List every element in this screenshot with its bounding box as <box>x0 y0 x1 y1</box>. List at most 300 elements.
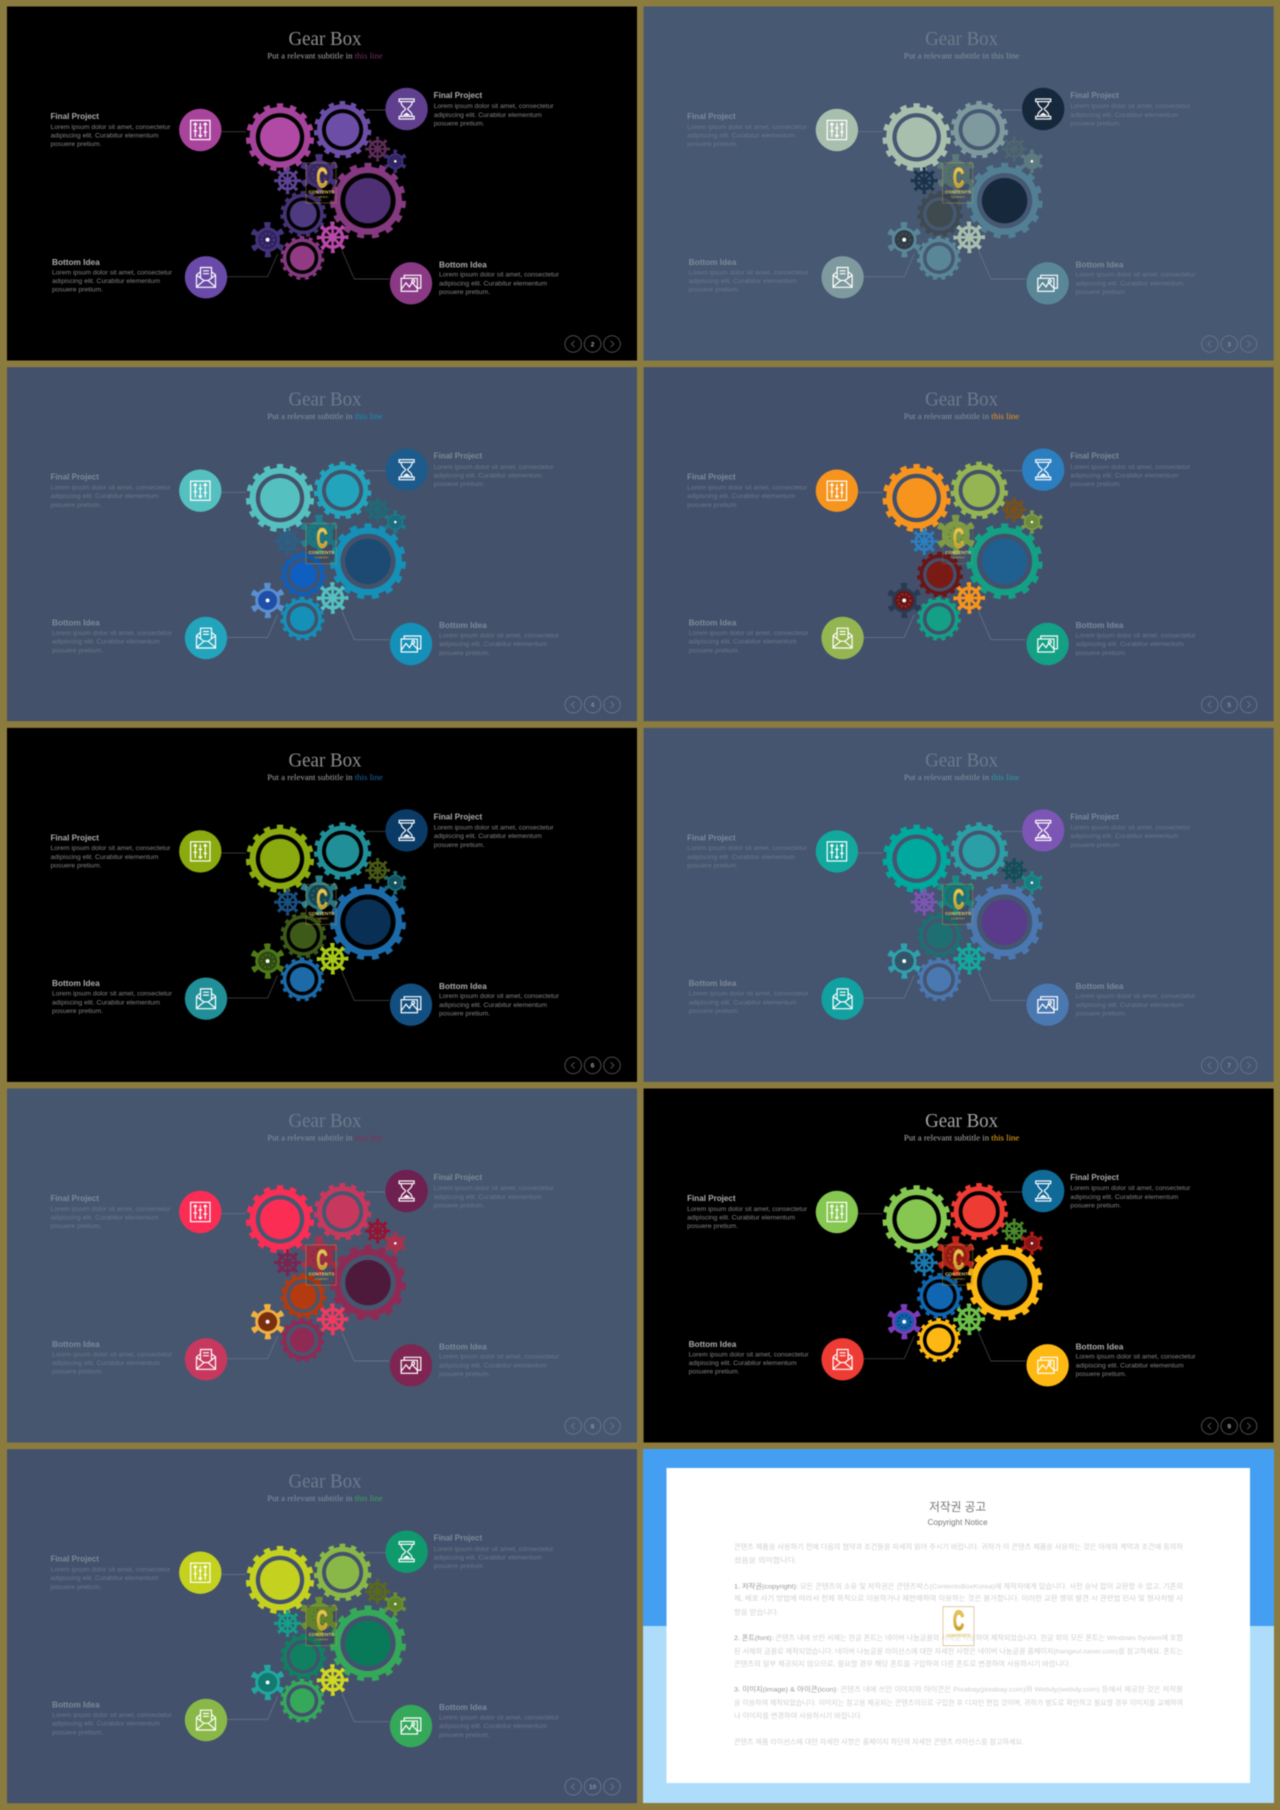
text block bottom right: Bottom Idea <box>439 621 487 630</box>
middle gear <box>918 192 961 236</box>
text block left: Lorem ipsum dolor sit amet, consectetur <box>50 485 171 492</box>
text block bottom left: Lorem ipsum dolor sit amet, consectetur <box>689 1351 809 1358</box>
icon circle: envelope <box>185 617 227 659</box>
top left gear <box>248 466 312 530</box>
helm wheel bottom <box>955 1305 983 1333</box>
top left gear <box>885 827 949 891</box>
large gear <box>969 886 1040 958</box>
notice subheading: Copyright Notice <box>928 1517 988 1527</box>
text block left <box>687 112 808 148</box>
small gear left <box>890 586 919 615</box>
helm wheel right <box>1003 499 1025 521</box>
icon circle: hourglass <box>1022 448 1064 491</box>
text block bottom right: posuere pretium. <box>1076 289 1127 296</box>
text block bottom left: adipiscing elit. Curabitur elementum <box>689 639 797 646</box>
top left gear <box>885 105 949 169</box>
text block bottom left: adipiscing elit. Curabitur elementum <box>52 1721 160 1728</box>
watermark logo: CONTENTS <box>308 550 334 555</box>
text block top right: adipiscing elit. Curabitur elementum <box>434 1194 542 1201</box>
text block bottom left: adipiscing elit. Curabitur elementum <box>52 639 160 646</box>
watermark logo: C <box>953 1605 964 1636</box>
icon circle: pictures <box>1026 984 1069 1026</box>
helm wheel bottom <box>955 584 983 612</box>
middle gear <box>918 553 961 596</box>
text block top right: Lorem ipsum dolor sit amet, consectetur <box>434 1546 554 1553</box>
text block top right: Lorem ipsum dolor sit amet, consectetur <box>1070 825 1191 832</box>
text block left: Final Project <box>50 473 99 482</box>
slide background <box>7 1449 637 1803</box>
icon circle: sliders <box>816 1191 858 1233</box>
text block left: posuere pretium. <box>687 1223 738 1230</box>
icon circle: hourglass <box>385 809 428 852</box>
text block bottom right: posuere pretium. <box>1076 650 1127 657</box>
text block left: posuere pretium. <box>50 863 102 870</box>
text block top right: Final Project <box>434 91 483 100</box>
bottom gear <box>918 598 960 639</box>
subtitle: Put a relevant subtitle in this line <box>904 1134 1020 1142</box>
gear cluster <box>885 824 1041 1000</box>
text block top right: posuere pretium. <box>1070 1202 1121 1210</box>
text block bottom left: Lorem ipsum dolor sit amet, consectetur <box>52 269 173 276</box>
subtitle: Put a relevant subtitle in this line <box>267 773 383 782</box>
small gear right <box>386 512 405 532</box>
subtitle: Put a relevant subtitle in this line <box>904 773 1020 782</box>
text block top right: adipiscing elit. Curabitur elementum <box>1070 833 1179 840</box>
helm wheel bottom <box>955 945 983 973</box>
icon circle: envelope <box>821 978 864 1020</box>
text block bottom left: posuere pretium. <box>52 1008 103 1015</box>
text block bottom right: adipiscing elit. Curabitur elementum <box>1076 1362 1184 1369</box>
text block bottom left: Bottom Idea <box>52 979 100 988</box>
text block bottom left: posuere pretium. <box>689 1008 740 1015</box>
subtitle: Put a relevant subtitle in this line <box>904 52 1020 60</box>
title: Gear Box <box>288 389 362 411</box>
icon circle: sliders <box>816 830 858 873</box>
title: Gear Box <box>288 28 362 50</box>
notice body text: 콘텐츠 제품 라이선스에 대한 자세한 사항은 홈페이지 하단의 자세한 콘텐츠 라이선스를 참고하세요. <box>734 1737 1024 1746</box>
center gear <box>940 1240 972 1272</box>
text block bottom left <box>52 1340 173 1376</box>
text block left: posuere pretium. <box>50 141 102 148</box>
icon circle: sliders <box>179 470 222 512</box>
text block bottom right <box>1076 260 1196 296</box>
middle gear <box>282 553 325 596</box>
page navigation: 7 <box>1227 1063 1231 1070</box>
watermark logo: CONTENTS <box>945 1272 971 1276</box>
watermark logo <box>306 162 336 203</box>
text block bottom left: posuere pretium. <box>52 1369 103 1376</box>
text block bottom right: adipiscing elit. Curabitur elementum <box>439 1723 547 1730</box>
text block bottom left: adipiscing elit. Curabitur elementum <box>689 1360 797 1367</box>
text block top right <box>1070 91 1191 128</box>
watermark logo <box>306 523 336 564</box>
text block top right: posuere pretium. <box>434 481 485 488</box>
title: Gear Box <box>288 1110 362 1132</box>
text block bottom right: posuere pretium. <box>439 1371 490 1378</box>
watermark logo <box>306 884 336 924</box>
text block bottom left: Bottom Idea <box>689 979 737 988</box>
small gear right <box>386 1594 405 1614</box>
text block left: adipiscing elit. Curabitur elementum <box>50 854 159 861</box>
helm wheel left <box>912 530 936 553</box>
top right gear <box>316 103 370 157</box>
page navigation <box>1202 1418 1257 1434</box>
watermark logo: C <box>953 162 964 193</box>
text block bottom right <box>1076 982 1196 1018</box>
small gear left <box>890 1307 919 1336</box>
slide background <box>7 728 637 1082</box>
gear cluster <box>248 1185 405 1361</box>
text block bottom left: posuere pretium. <box>689 287 740 294</box>
text block bottom left: Bottom Idea <box>689 618 737 628</box>
text block bottom left <box>52 979 173 1015</box>
small gear left <box>890 947 919 976</box>
icon circle: hourglass <box>385 1170 428 1212</box>
watermark logo: CONTENTS <box>308 1272 334 1276</box>
text block bottom right <box>1076 621 1196 657</box>
text block bottom right: Bottom Idea <box>439 1703 487 1712</box>
center gear <box>940 879 972 912</box>
helm wheel bottom <box>319 1666 346 1694</box>
slide page 6: lime and blue gears on black <box>7 728 637 1082</box>
text block bottom left: posuere pretium. <box>52 287 103 294</box>
subtitle: Put a relevant subtitle in this line <box>267 412 383 421</box>
text block left: Final Project <box>50 112 99 121</box>
watermark logo: C <box>316 162 328 193</box>
helm wheel bottom <box>319 1305 346 1333</box>
top left gear <box>885 466 949 530</box>
text block top right <box>434 91 554 128</box>
connector lines <box>221 831 389 1000</box>
text block bottom left: posuere pretium. <box>689 647 740 654</box>
center gear <box>940 518 972 551</box>
connector lines <box>221 1553 389 1722</box>
helm wheel left <box>276 1251 299 1274</box>
text block left: Lorem ipsum dolor sit amet, consectetur <box>50 1206 171 1213</box>
icon circle: hourglass <box>385 88 428 130</box>
text block top right: adipiscing elit. Curabitur elementum <box>1070 1194 1179 1201</box>
notice heading: 저작권 공고 <box>929 1500 986 1514</box>
page navigation: 9 <box>1227 1423 1231 1430</box>
text block bottom left <box>52 618 173 654</box>
notice body text: 2. 폰트(font): 콘텐츠 내에 쓰인 서체는 한글 폰트는 네이버 나눔글꼴의 서체를 사용하여 제작되었습니다. 한글 외의 모든 폰트는 Windows System에 포함 <box>734 1633 1183 1642</box>
center gear <box>303 879 336 912</box>
text block bottom left: adipiscing elit. Curabitur elementum <box>689 999 797 1006</box>
text block left: posuere pretium. <box>50 502 102 509</box>
icon circle: sliders <box>179 109 222 151</box>
center gear <box>303 1240 336 1272</box>
subtitle: Put a relevant subtitle in this line <box>904 412 1020 421</box>
large gear <box>332 165 404 236</box>
watermark logo: COMPANY <box>315 1638 329 1642</box>
text block bottom left: Bottom Idea <box>52 258 100 267</box>
text block top right: Final Project <box>434 1173 483 1182</box>
connector lines <box>221 110 389 279</box>
text block bottom right: Bottom Idea <box>1076 260 1124 269</box>
icon circle: sliders <box>179 1552 222 1594</box>
text block left: Lorem ipsum dolor sit amet, consectetur <box>50 124 171 131</box>
text block left <box>50 112 171 148</box>
watermark logo: CONTENTS <box>946 1633 970 1638</box>
small gear right <box>1022 873 1041 892</box>
top right gear <box>316 463 370 517</box>
center gear <box>303 158 336 190</box>
small gear left <box>253 225 282 254</box>
bottom gear <box>918 959 960 1000</box>
watermark logo: CONTENTS <box>308 911 334 916</box>
icon circle: pictures <box>1026 1344 1069 1386</box>
slide page 3: grey-green gears on slate <box>644 6 1274 360</box>
small gear right <box>1022 512 1041 532</box>
text block top right: adipiscing elit. Curabitur elementum <box>1070 112 1179 119</box>
notice body text: 된 서체와 글꼴로 제작되었습니다. 네이버 나눔글꼴 라이선스에 대한 자세한 사항은 네이버 나눔글꼴 홈페이지(hangeul.naver.com)를 참고하세요. 폰트는 <box>734 1646 1183 1656</box>
text block left: Final Project <box>687 833 736 842</box>
text block bottom right: adipiscing elit. Curabitur elementum <box>1076 280 1184 287</box>
helm wheel left <box>912 169 936 192</box>
icon circle: envelope <box>821 617 864 659</box>
text block bottom left: adipiscing elit. Curabitur elementum <box>52 278 160 285</box>
watermark logo: COMPANY <box>951 556 965 560</box>
center gear <box>940 158 972 190</box>
slide background <box>644 367 1274 721</box>
middle gear <box>918 914 961 957</box>
slide page 10: green gears on slate <box>7 1449 637 1803</box>
watermark logo <box>943 884 973 924</box>
helm wheel right <box>1003 860 1025 881</box>
text block bottom right <box>439 260 560 296</box>
text block top right <box>1070 1173 1191 1210</box>
text block bottom right <box>439 621 560 657</box>
bottom gear <box>918 1319 960 1361</box>
text block top right <box>434 1173 554 1210</box>
watermark logo: COMPANY <box>315 195 329 199</box>
text block top right: adipiscing elit. Curabitur elementum <box>434 1554 542 1561</box>
icon circle: envelope <box>821 256 864 298</box>
text block top right: Lorem ipsum dolor sit amet, consectetur <box>434 825 554 832</box>
helm wheel right <box>367 138 388 160</box>
text block top right <box>1070 812 1191 849</box>
small gear right <box>1022 152 1041 171</box>
text block left: Final Project <box>687 112 736 121</box>
text block bottom right: posuere pretium. <box>439 1011 490 1018</box>
text block left: posuere pretium. <box>50 1584 102 1591</box>
bottom gear <box>282 1319 323 1361</box>
page navigation: 5 <box>1227 702 1231 709</box>
slide page 8: crimson gears on slate <box>7 1088 637 1442</box>
text block bottom left: Bottom Idea <box>52 1700 100 1709</box>
watermark logo: CONTENTS <box>945 190 971 194</box>
text block left: Final Project <box>50 833 99 842</box>
connector lines <box>858 471 1026 640</box>
text block left: Lorem ipsum dolor sit amet, consectetur <box>687 485 808 492</box>
text block bottom right: posuere pretium. <box>439 1732 490 1739</box>
subtitle: Put a relevant subtitle in this line <box>267 52 383 60</box>
bottom gear <box>282 598 323 639</box>
text block bottom right: Bottom Idea <box>1076 1342 1124 1351</box>
page navigation <box>565 1418 620 1434</box>
text block bottom left <box>52 1700 173 1736</box>
helm wheel right <box>1003 1220 1025 1242</box>
middle gear <box>282 914 325 957</box>
notice body text: 항을 받습니다. <box>734 1608 779 1616</box>
helm wheel left <box>912 1251 936 1274</box>
notice body text: 3. 이미지(image) & 아이콘(icon): 콘텐츠 내에 쓰인 이미지와 아이콘은 Pixabay(pixabay.com)와 Webdy(webdy.com) 등에서 제공한 것은 저작물 <box>734 1684 1183 1694</box>
large gear <box>969 165 1040 236</box>
large gear <box>332 886 404 958</box>
small gear left <box>890 225 919 254</box>
text block bottom right: posuere pretium. <box>1076 1371 1127 1378</box>
large gear <box>332 1608 404 1679</box>
text block bottom right: adipiscing elit. Curabitur elementum <box>439 1362 547 1369</box>
notice body text: 제, 배포 사기 방법에 따라서 전체 목적으로 이용하거나 재판매하여 이용하는 것은 불가합니다. 이러한 교환 행위 발견 시 관련법 민사 및 형사처벌 사 <box>734 1594 1183 1602</box>
text block bottom left <box>689 1340 809 1376</box>
icon circle: sliders <box>816 470 858 512</box>
watermark logo: COMPANY <box>315 556 329 560</box>
text block bottom right <box>439 1703 560 1739</box>
text block bottom left <box>689 979 809 1015</box>
center gear <box>303 518 336 551</box>
text block bottom right: adipiscing elit. Curabitur elementum <box>439 280 547 287</box>
text block bottom left: Bottom Idea <box>689 258 737 267</box>
text block bottom right: adipiscing elit. Curabitur elementum <box>439 1002 547 1009</box>
watermark logo: C <box>316 884 328 915</box>
top right gear <box>952 824 1006 878</box>
watermark logo: COMPANY <box>315 1277 329 1281</box>
text block left <box>50 1194 171 1230</box>
page navigation <box>1202 336 1257 352</box>
text block bottom right: adipiscing elit. Curabitur elementum <box>439 641 547 648</box>
text block left: adipiscing elit. Curabitur elementum <box>50 1214 159 1222</box>
text block bottom right: adipiscing elit. Curabitur elementum <box>1076 1002 1184 1009</box>
helm wheel left <box>912 890 936 914</box>
text block bottom left: Lorem ipsum dolor sit amet, consectetur <box>689 991 809 998</box>
icon circle: envelope <box>821 1338 864 1380</box>
slide page 2: purple gears on black <box>7 6 637 360</box>
gear cluster <box>885 103 1041 279</box>
large gear <box>332 1247 404 1318</box>
page navigation <box>565 696 620 713</box>
page navigation <box>565 1057 620 1074</box>
page navigation: 6 <box>591 1063 595 1070</box>
text block bottom left: Lorem ipsum dolor sit amet, consectetur <box>689 269 809 276</box>
text block bottom right: Bottom Idea <box>439 982 487 991</box>
text block left <box>50 1555 171 1591</box>
text block bottom right: Lorem ipsum dolor sit amet, consectetur <box>439 1354 560 1361</box>
icon circle: hourglass <box>385 1530 428 1573</box>
icon circle: pictures <box>390 623 432 665</box>
text block bottom left: posuere pretium. <box>52 1729 103 1736</box>
text block top right: Lorem ipsum dolor sit amet, consectetur <box>1070 1185 1191 1192</box>
watermark logo: COMPANY <box>951 916 965 920</box>
watermark logo: CONTENTS <box>945 911 971 916</box>
title: Gear Box <box>288 1471 362 1493</box>
page navigation: 3 <box>1227 341 1231 348</box>
icon circle: hourglass <box>1022 1170 1064 1212</box>
page navigation <box>1202 1057 1257 1074</box>
connector lines <box>858 831 1026 1000</box>
helm wheel bottom <box>319 584 346 612</box>
gear cluster <box>248 1545 405 1721</box>
watermark logo: CONTENTS <box>308 1632 334 1637</box>
text block top right: posuere pretium. <box>434 1202 485 1210</box>
light blue background bottom <box>643 1626 1274 1803</box>
text block top right <box>434 452 554 488</box>
text block bottom left: posuere pretium. <box>689 1369 740 1376</box>
text block top right: Final Project <box>1070 812 1119 821</box>
helm wheel bottom <box>319 223 346 251</box>
text block left: posuere pretium. <box>687 863 738 870</box>
top right gear <box>316 1185 370 1239</box>
text block top right <box>434 1534 554 1570</box>
page navigation: 10 <box>589 1784 597 1791</box>
subtitle: Put a relevant subtitle in this line <box>267 1134 383 1142</box>
helm wheel bottom <box>955 223 983 251</box>
page navigation: 4 <box>591 702 595 709</box>
notice body text: 콘텐츠 제품을 사용하기 전에 다음의 협약과 조건들을 자세히 읽어 주시기 바랍니다. 귀하가 이 콘텐츠 제품을 사용하는 것은 아래의 계약과 조건에 동의하 <box>734 1542 1183 1551</box>
icon circle: envelope <box>185 256 227 298</box>
middle gear <box>282 1635 325 1678</box>
title: Gear Box <box>925 1110 998 1132</box>
title: Gear Box <box>925 28 998 50</box>
text block bottom left: Bottom Idea <box>52 618 100 628</box>
title: Gear Box <box>925 389 998 411</box>
small gear left <box>253 947 282 976</box>
top left gear <box>248 1548 312 1612</box>
text block top right: adipiscing elit. Curabitur elementum <box>434 112 542 119</box>
text block left: posuere pretium. <box>50 1223 102 1230</box>
text block bottom right: Lorem ipsum dolor sit amet, consectetur <box>1076 993 1196 1000</box>
text block left <box>50 833 171 870</box>
text block bottom right: Bottom Idea <box>1076 982 1124 991</box>
helm wheel right <box>367 860 388 881</box>
middle gear <box>282 192 325 236</box>
helm wheel left <box>276 1612 299 1635</box>
icon circle: envelope <box>185 1699 227 1741</box>
text block bottom right: Lorem ipsum dolor sit amet, consectetur <box>1076 1354 1196 1361</box>
text block bottom right: Lorem ipsum dolor sit amet, consectetur <box>1076 272 1196 279</box>
watermark logo: C <box>953 523 964 554</box>
helm wheel left <box>276 530 299 553</box>
notice body text: 셨음을 의미합니다. <box>734 1556 797 1564</box>
top right gear <box>952 103 1006 157</box>
center gear <box>303 1600 336 1633</box>
page navigation <box>565 336 620 352</box>
connector lines <box>858 110 1026 279</box>
text block top right: posuere pretium. <box>434 842 485 849</box>
text block bottom right: Bottom Idea <box>439 1342 487 1351</box>
text block top right: Final Project <box>434 1534 483 1543</box>
watermark logo <box>306 1244 336 1285</box>
slide background <box>7 367 637 721</box>
text block bottom left: Lorem ipsum dolor sit amet, consectetur <box>52 991 173 998</box>
text block top right: adipiscing elit. Curabitur elementum <box>1070 473 1179 480</box>
watermark logo: C <box>316 1605 328 1636</box>
text block bottom right: Bottom Idea <box>439 260 487 269</box>
page navigation <box>1202 696 1257 713</box>
text block bottom left: adipiscing elit. Curabitur elementum <box>689 278 797 285</box>
top right gear <box>952 463 1006 517</box>
gear cluster <box>248 463 405 639</box>
text block left: Lorem ipsum dolor sit amet, consectetur <box>50 845 171 852</box>
text block bottom left: Bottom Idea <box>52 1340 100 1349</box>
page navigation: 8 <box>591 1423 595 1430</box>
top left gear <box>248 1187 312 1251</box>
text block left: adipiscing elit. Curabitur elementum <box>50 132 159 140</box>
notice body text <box>734 1542 1183 1746</box>
icon circle: envelope <box>185 978 227 1020</box>
white panel <box>666 1468 1250 1783</box>
notice body text: 콘텐츠의 일부 제공되지 않으므로, 필요할 경우 해당 폰트를 구입하여 다른 폰트로 변경하여 사용하시기 바랍니다. <box>734 1659 1071 1668</box>
